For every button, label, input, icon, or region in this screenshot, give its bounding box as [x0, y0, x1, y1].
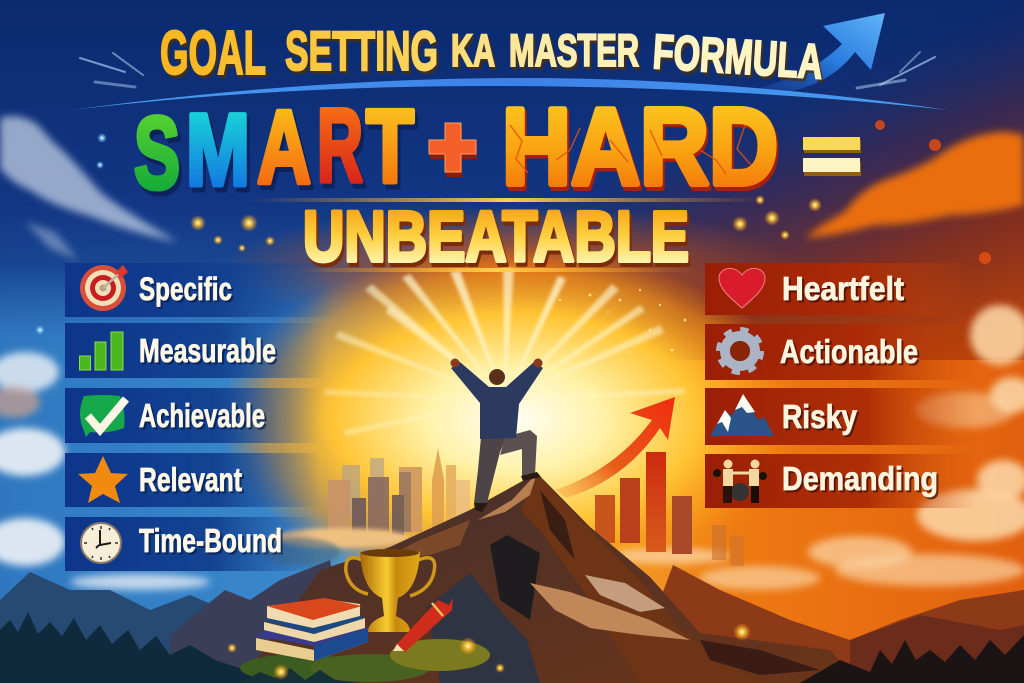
word: SMART: T	[366, 89, 414, 205]
icon: heart	[719, 268, 765, 308]
bar: Specific	[65, 263, 330, 317]
bar: Demanding: Demanding	[784, 462, 940, 499]
left leg	[474, 437, 506, 503]
light rays from the summit	[325, 268, 685, 436]
bar: Time-Bound: Time-Bound	[139, 522, 282, 559]
bar: Actionable: Actionable	[782, 335, 920, 372]
word: SMART: S	[134, 96, 180, 210]
word: HARD: HARD	[504, 89, 780, 212]
city skyline left	[260, 448, 470, 566]
word: SMART: R	[317, 88, 363, 204]
arrow: red rising arrow	[555, 397, 675, 498]
bar: Time-Bound: Time-Bound	[141, 524, 284, 561]
right clouds	[610, 132, 1024, 590]
left clouds	[0, 116, 210, 590]
bar: Heartfelt: Heartfelt	[784, 272, 906, 309]
icon: snowy mountains	[710, 394, 774, 436]
title: Goal Setting Ka Master Formula: MASTER	[509, 25, 639, 76]
bar: Risky: Risky	[784, 400, 860, 437]
top title decorative accents	[80, 52, 935, 88]
right leg	[500, 430, 537, 477]
hands	[450, 358, 542, 368]
title: Goal Setting Ka Master Formula: GOAL	[160, 19, 266, 88]
equals sign	[803, 137, 861, 176]
title: Goal Setting Ka Master Formula: KA	[451, 25, 495, 76]
icon: green check	[80, 395, 126, 437]
sparkles	[35, 120, 991, 335]
icon: gear	[719, 330, 761, 372]
word: SMART: R	[320, 93, 366, 209]
heading: SMART + HARD =	[134, 86, 861, 215]
bar: Risky	[705, 388, 975, 445]
bar: Heartfelt	[705, 263, 970, 315]
plus sign	[429, 123, 477, 177]
bar: Relevant	[65, 453, 320, 507]
word: SMART: M	[189, 98, 253, 212]
word: SMART: A	[260, 95, 314, 211]
icon: red pen	[393, 598, 453, 652]
bar: Heartfelt: Heartfelt	[782, 270, 904, 307]
icon: green bar chart	[80, 332, 123, 370]
bar: Demanding: Demanding	[782, 460, 938, 497]
torso and arms	[451, 362, 543, 439]
heading: UNBEATABLE: UNBEATABLE	[305, 202, 691, 281]
bar: Achievable: Achievable	[141, 399, 267, 436]
word: SMART: T	[369, 94, 417, 210]
bar: Relevant: Relevant	[141, 463, 244, 500]
icon: blue rising arrow	[760, 13, 885, 92]
panel: SMART criteria	[65, 263, 330, 571]
foreground forest	[0, 612, 1024, 683]
bar: Specific: Specific	[139, 271, 232, 307]
head	[489, 369, 505, 385]
title: Goal Setting Ka Master Formula: SETTING	[285, 19, 438, 82]
bar: Measurable: Measurable	[141, 334, 278, 371]
word: SMART: A	[257, 90, 311, 206]
bar: Achievable	[65, 388, 320, 443]
icon: two people with weight	[713, 460, 767, 503]
title: Goal Setting Ka Master Formula	[160, 19, 826, 93]
bar: Measurable: Measurable	[139, 332, 276, 369]
word: SMART: M	[186, 93, 250, 207]
word: SMART: S	[137, 101, 183, 215]
arc divider	[72, 78, 948, 110]
books	[256, 598, 368, 661]
trophy	[346, 549, 435, 632]
shoes	[474, 472, 541, 512]
bottom sparkles	[227, 623, 751, 680]
panel: HARD criteria	[705, 263, 975, 508]
word: HARD: HARD	[502, 86, 778, 208]
bar: Risky: Risky	[782, 398, 858, 435]
bar: Actionable: Actionable	[780, 333, 918, 370]
title: Goal Setting Ka Master Formula: GOAL	[162, 22, 268, 91]
gold divider lines around UNBEATABLE	[249, 198, 766, 272]
icon: orange star	[78, 456, 128, 503]
word: SMART	[134, 88, 417, 215]
bar: Time-Bound	[65, 517, 315, 571]
title: Goal Setting Ka Master Formula: KA	[453, 28, 497, 79]
person with raised arms	[450, 358, 543, 512]
icon: clock	[81, 523, 121, 563]
title: Goal Setting Ka Master Formula: FORMULA	[653, 28, 826, 93]
bar: Measurable	[65, 323, 325, 378]
chart: rising buildings	[595, 452, 744, 566]
main mountain peak	[240, 473, 860, 683]
far mountains	[0, 560, 1024, 683]
title: Goal Setting Ka Master Formula: FORMULA	[651, 25, 824, 90]
bar: Achievable: Achievable	[139, 397, 265, 434]
heading: UNBEATABLE: UNBEATABLE	[303, 198, 689, 277]
icon: target with arrow	[80, 265, 128, 311]
title: Goal Setting Ka Master Formula: SETTING	[287, 22, 440, 85]
bar: Specific: Specific	[141, 273, 234, 309]
glitter on the right of the glow	[559, 289, 686, 353]
bar: Relevant: Relevant	[139, 461, 242, 498]
bar: Actionable	[705, 324, 975, 380]
title: Goal Setting Ka Master Formula: MASTER	[511, 28, 641, 79]
bar: Demanding	[705, 454, 975, 508]
